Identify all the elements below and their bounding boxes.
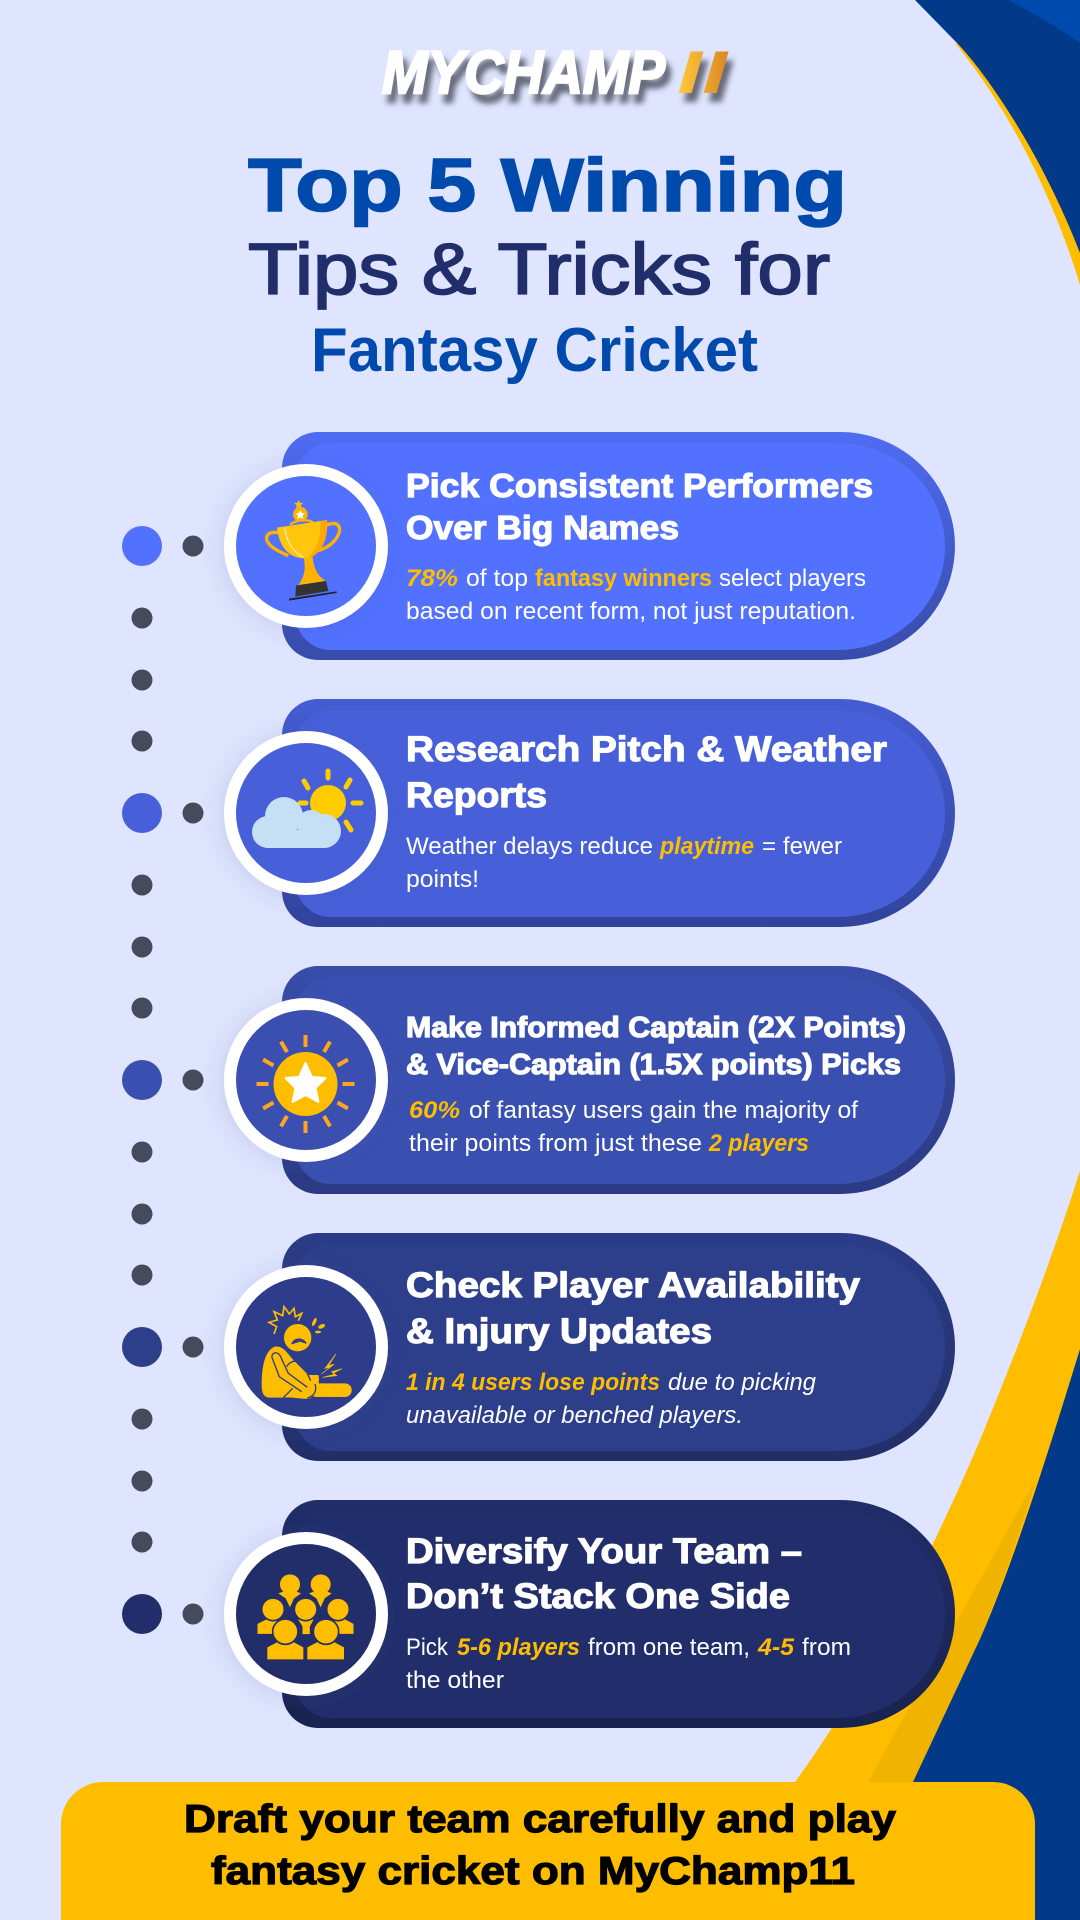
tip 3 heading xyxy=(406,1012,906,1081)
call to action banner xyxy=(61,1782,1035,1920)
tip 1 body xyxy=(406,565,866,625)
tip 1 body: 78% xyxy=(406,565,458,592)
tip 4 body xyxy=(406,1369,817,1429)
icon: group of players xyxy=(257,1574,354,1659)
title: Tips & Tricks for xyxy=(248,230,830,310)
tip 1 heading xyxy=(406,467,873,546)
tip 5 body: from one team, xyxy=(588,1634,750,1661)
tip 2 body: playtime xyxy=(659,833,754,860)
call to action banner: Draft your team carefully and play xyxy=(184,1798,896,1841)
tip 1 heading: Pick Consistent Performers xyxy=(406,467,873,504)
tip 5 heading: Don’t Stack One Side xyxy=(406,1577,790,1616)
panel: tip 4 availability and injury xyxy=(230,1233,955,1461)
panel: tip 5 diversify team xyxy=(230,1500,955,1728)
tip 2 heading: Research Pitch & Weather xyxy=(406,730,887,769)
title xyxy=(248,143,847,385)
tip 4 heading: & Injury Updates xyxy=(406,1312,712,1351)
tip 3 body: of fantasy users gain the majority of xyxy=(469,1097,858,1124)
tip 5 body: the other xyxy=(406,1667,504,1694)
icon: sun behind cloud xyxy=(252,771,361,848)
tip 2 heading: Reports xyxy=(406,776,547,815)
tip 3 heading: & Vice-Captain (1.5X points) Picks xyxy=(406,1049,901,1081)
tip 5 body xyxy=(406,1634,851,1694)
tip 3 body: 2 players xyxy=(708,1130,809,1157)
title: Fantasy Cricket xyxy=(311,316,758,385)
tip 1 body: fantasy winners xyxy=(535,565,712,592)
top-right corner swoosh xyxy=(915,0,1080,285)
panel: tip 2 pitch and weather xyxy=(230,699,955,927)
tip 5 body: 4-5 xyxy=(757,1634,795,1661)
panel: tip 3 captain picks xyxy=(230,966,955,1194)
tip 3 body: 60% xyxy=(409,1097,460,1124)
call to action banner: fantasy cricket on MyChamp11 xyxy=(211,1850,855,1893)
tip 4 body: 1 in 4 users lose points xyxy=(406,1369,660,1396)
tip 1 body: select players xyxy=(719,565,866,592)
tip 3 heading: Make Informed Captain (2X Points) xyxy=(406,1012,906,1044)
tip 5 body: from xyxy=(802,1634,851,1661)
tip 2 body: Weather delays reduce xyxy=(406,833,653,860)
timeline dots xyxy=(122,526,204,1634)
bottom-right swoosh xyxy=(795,1171,1080,1920)
icon: injured player xyxy=(262,1307,352,1399)
tip 1 body: of top xyxy=(466,565,528,592)
tip 3 body: their points from just these xyxy=(409,1130,702,1157)
panel: tip 1 consistent performers xyxy=(230,432,955,660)
icon: trophy xyxy=(267,500,340,601)
tip 4 body: unavailable or benched players. xyxy=(406,1402,743,1429)
tip 2 body: = fewer xyxy=(762,833,842,860)
tip 5 heading: Diversify Your Team – xyxy=(406,1532,802,1571)
tip 4 heading xyxy=(406,1266,861,1351)
logo: MyChamp11: MYCHAMP xyxy=(382,39,666,106)
icon: star sun xyxy=(256,1035,354,1133)
logo: MyChamp11: II xyxy=(677,39,729,106)
tip 5 body: 5-6 players xyxy=(457,1634,580,1661)
tip 2 heading xyxy=(406,730,887,815)
tip 1 heading: Over Big Names xyxy=(406,509,679,546)
tip 5 heading xyxy=(406,1532,802,1616)
tip 2 body: points! xyxy=(406,866,479,893)
tip 1 body: based on recent form, not just reputation. xyxy=(406,598,856,625)
tip 4 body: due to picking xyxy=(668,1369,817,1396)
tip 3 body xyxy=(409,1097,858,1157)
tip 5 body: Pick xyxy=(406,1634,449,1661)
tip 2 body xyxy=(406,833,842,893)
title: Top 5 Winning xyxy=(248,143,847,227)
tip 4 heading: Check Player Availability xyxy=(406,1266,861,1305)
